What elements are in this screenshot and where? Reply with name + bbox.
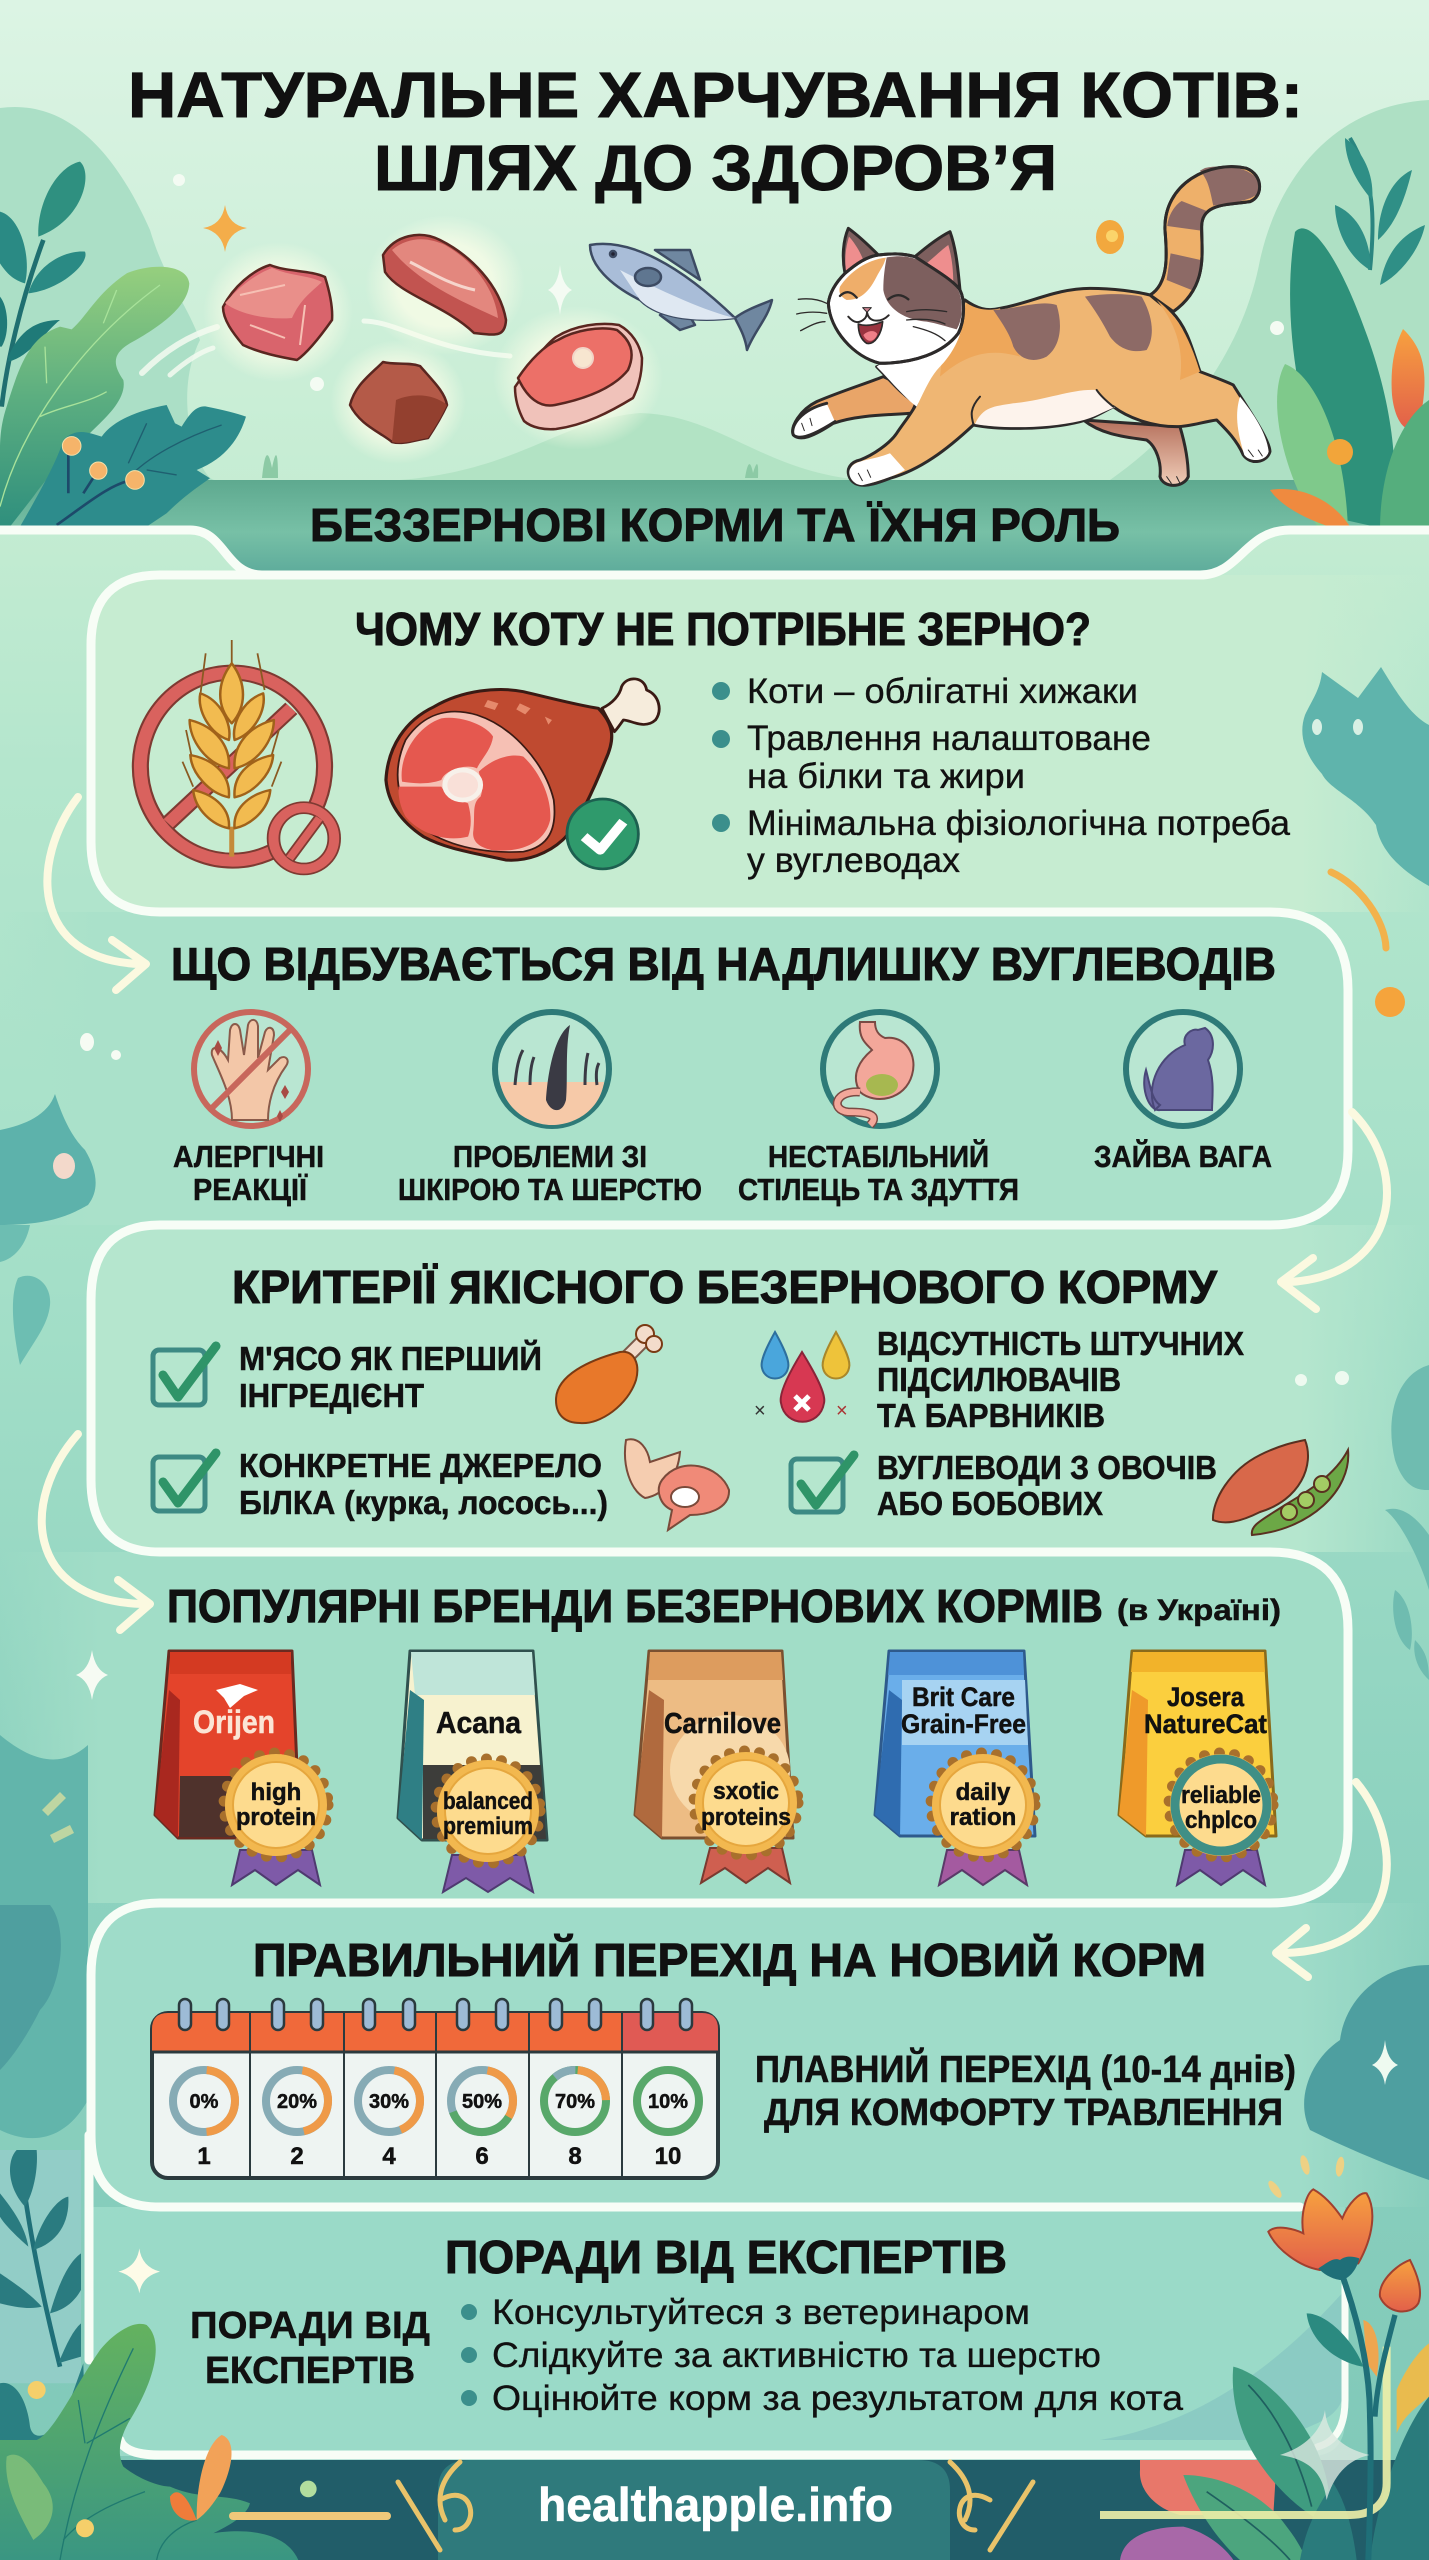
list: why no grain: Травлення налаштоване	[747, 719, 1151, 758]
list: advice	[461, 2293, 1184, 2418]
footer url: healthapple.info	[538, 2478, 893, 2531]
brand: Carnilove bag	[635, 1651, 793, 1838]
side label: ПОРАДИ ВІД	[190, 2305, 430, 2347]
subtitle: БЕЗЗЕРНОВІ КОРМИ ТА ЇХНЯ РОЛЬ	[310, 499, 1120, 551]
criterion: specific protein source: КОНКРЕТНЕ ДЖЕРЕЛО	[239, 1447, 602, 1484]
calendar day numbers	[197, 2143, 681, 2170]
list: advice: Слідкуйте за активністю та шерстю	[492, 2336, 1101, 2375]
sparkles	[173, 174, 1284, 391]
decoration: teal cat left	[0, 1094, 96, 1225]
label: skin and coat problems: ПРОБЛЕМИ ЗІ	[453, 1139, 647, 1174]
donut day 2	[261, 2065, 333, 2137]
calendar day numbers: 2	[290, 2143, 304, 2170]
icon: stomach	[823, 1012, 937, 1126]
bottom-left foliage	[0, 2150, 317, 2560]
decoration: teal cat right	[1302, 667, 1429, 886]
list: why no grain: на білки та жири	[747, 757, 1025, 796]
donut day 4	[353, 2065, 425, 2137]
donut day 4: 30%	[369, 2091, 409, 2113]
badge: high protein: high	[251, 1779, 301, 1806]
panel: correct transition	[152, 1934, 1296, 2178]
criterion: meat first: ІНГРЕДІЄНТ	[239, 1377, 424, 1414]
list: why no grain: Мінімальна фізіологічна потреба	[747, 804, 1291, 843]
title: ШЛЯХ ДО ЗДОРОВ’Я	[374, 132, 1057, 204]
icon: chicken leg	[556, 1325, 662, 1423]
badge: high protein: protein	[236, 1804, 316, 1831]
title: НАТУРАЛЬНЕ ХАРЧУВАННЯ КОТІВ:	[128, 59, 1303, 131]
panel: expert advice	[190, 2231, 1184, 2418]
label: skin and coat problems	[398, 1139, 702, 1207]
badge: reliable choice: reliable	[1181, 1782, 1261, 1809]
badge: exotic proteins: sxotic	[713, 1778, 779, 1805]
icon: dye drops	[754, 1332, 849, 1422]
banner: subtitle band	[205, 532, 1265, 574]
heading: ПОПУЛЯРНІ БРЕНДИ БЕЗЕРНОВИХ КОРМІВ	[167, 1580, 1103, 1632]
label: allergic reactions: РЕАКЦІЇ	[193, 1172, 308, 1207]
badge: balanced premium	[436, 1759, 540, 1892]
icon: overweight cat	[1126, 1012, 1240, 1126]
decorative white snake path	[0, 530, 1429, 2455]
donut day 1	[170, 2067, 238, 2135]
arrow: panel 4 to panel 5	[1276, 1782, 1387, 1977]
decoration: teal blob bottom-right	[1304, 1965, 1429, 2180]
decoration: gold arc	[1331, 872, 1386, 948]
badge: exotic proteins	[694, 1751, 798, 1883]
heading: (в Україні)	[1117, 1594, 1281, 1627]
icon: chicken and salmon	[625, 1439, 729, 1530]
arrow: panel 1 to panel 2	[47, 797, 146, 990]
criterion: specific protein source: БІЛКА (курка, лосось...)	[239, 1484, 608, 1521]
donut day 1: 0%	[190, 2091, 219, 2113]
panel: popular brands	[155, 1580, 1281, 1892]
panel: why a cat does not need grain	[140, 603, 1291, 880]
note: smooth transition: ДЛЯ КОМФОРТУ ТРАВЛЕННЯ	[764, 2092, 1283, 2134]
brand: Acana bag: Acana	[436, 1705, 522, 1740]
icon: checkbox 1	[153, 1346, 216, 1405]
criterion: no artificial enhancers: ПІДСИЛЮВАЧІВ	[877, 1361, 1121, 1398]
decoration: blobs right	[1385, 1365, 1429, 1680]
illustration: happy running cat	[793, 166, 1270, 485]
icon: meat chunks	[203, 215, 663, 464]
ground strip	[0, 480, 1429, 532]
donut day 10	[637, 2070, 699, 2132]
criterion: no artificial enhancers	[877, 1325, 1244, 1434]
brand: Brit Care bag: Brit Care	[912, 1682, 1015, 1712]
calendar day numbers: 1	[197, 2143, 211, 2170]
label: excess weight: ЗАЙВА ВАГА	[1094, 1138, 1272, 1174]
brand: Josera bag: NatureCat	[1144, 1709, 1267, 1739]
calendar day numbers: 4	[382, 2143, 396, 2170]
brand: Carnilove bag: Carnilove	[664, 1708, 781, 1740]
header foliage: left	[0, 162, 246, 527]
donut day 8	[531, 2057, 619, 2145]
side label	[190, 2305, 430, 2392]
decoration: teal cat bottom-left	[0, 1735, 88, 2138]
arrow: panel 3 to panel 4	[42, 1434, 150, 1630]
icon: fish	[590, 244, 772, 350]
brand: Orijen bag	[155, 1651, 300, 1838]
icon: checkbox 2	[153, 1453, 216, 1511]
badge: balanced premium: premium	[443, 1813, 533, 1840]
heading: ЩО ВІДБУВАЄТЬСЯ ВІД НАДЛИШКУ ВУГЛЕВОДІВ	[171, 938, 1276, 990]
badge: reliable choice	[1169, 1753, 1273, 1885]
icon: dye drops: ×	[754, 1400, 766, 1422]
criterion: meat first	[239, 1339, 542, 1414]
criterion: no artificial enhancers: ВІДСУТНІСТЬ ШТУЧНИХ	[877, 1325, 1244, 1362]
heading: ПОРАДИ ВІД ЕКСПЕРТІВ	[445, 2231, 1007, 2283]
panel fills	[0, 575, 1429, 2456]
icon: dye drops: ×	[836, 1400, 848, 1422]
icon: skin and hair	[495, 1012, 609, 1126]
criterion: no artificial enhancers: ТА БАРВНИКІВ	[877, 1397, 1105, 1434]
panel: excess carbohydrates	[171, 938, 1276, 1207]
calendar rings	[179, 1999, 692, 2030]
heading: ПРАВИЛЬНИЙ ПЕРЕХІД НА НОВИЙ КОРМ	[253, 1934, 1206, 1986]
title	[128, 59, 1303, 204]
criterion: carbs from vegetables: АБО БОБОВИХ	[877, 1485, 1103, 1522]
side decorations	[0, 667, 1429, 2180]
heading: ЧОМУ КОТУ НЕ ПОТРІБНЕ ЗЕРНО?	[355, 603, 1091, 655]
icon: crossed wheat	[140, 640, 334, 869]
cat tail	[1150, 166, 1260, 312]
list: advice: Консультуйтеся з ветеринаром	[492, 2293, 1030, 2332]
brand: Josera bag	[1119, 1651, 1276, 1836]
panel: quality criteria	[153, 1261, 1348, 1535]
badge: daily ration: daily	[956, 1779, 1011, 1806]
note: smooth transition	[755, 2046, 1296, 2134]
label: allergic reactions: АЛЕРГІЧНІ	[173, 1139, 324, 1174]
decoration: blobs left	[0, 1225, 50, 1365]
icon: ham with check	[386, 679, 659, 869]
icon: checkbox 3	[791, 1455, 854, 1512]
label: unstable stool and bloating: НЕСТАБІЛЬНИЙ	[768, 1138, 989, 1174]
brand: Acana bag	[398, 1651, 547, 1840]
chart: transition calendar	[152, 1999, 718, 2178]
brand: Orijen bag: Orijen	[193, 1704, 275, 1740]
footer ornament	[233, 2460, 1033, 2560]
donut day 10: 10%	[648, 2091, 688, 2113]
icon: allergy hand	[194, 1012, 308, 1126]
calendar day numbers: 8	[568, 2143, 582, 2170]
list: advice: Оцінюйте корм за результатом для кота	[492, 2379, 1184, 2418]
calendar day numbers: 10	[655, 2143, 681, 2170]
criterion: carbs from vegetables: ВУГЛЕВОДИ З ОВОЧІВ	[877, 1449, 1217, 1486]
badge: reliable choice: chplco	[1185, 1807, 1257, 1834]
footer band	[0, 2460, 1429, 2560]
label: unstable stool and bloating	[738, 1138, 1019, 1207]
badge: high protein	[224, 1753, 328, 1885]
list: why no grain	[712, 672, 1291, 880]
donut day 6	[440, 2059, 524, 2143]
motion swoosh	[142, 321, 510, 375]
note: smooth transition: ПЛАВНИЙ ПЕРЕХІД (10-14 днів)	[755, 2046, 1296, 2091]
side label: ЕКСПЕРТІВ	[205, 2350, 415, 2392]
bottom-right foliage	[1100, 2150, 1429, 2560]
label: unstable stool and bloating: СТІЛЕЦЬ ТА ЗДУТТЯ	[738, 1172, 1019, 1207]
arrow: panel 2 to panel 3	[1281, 1112, 1387, 1309]
brand: Brit Care bag	[875, 1651, 1035, 1836]
list: why no grain: у вуглеводах	[747, 841, 961, 880]
badge: balanced premium: balanced	[443, 1788, 533, 1815]
criterion: specific protein source	[239, 1447, 608, 1521]
calendar day numbers: 6	[475, 2143, 489, 2170]
criterion: carbs from vegetables	[877, 1449, 1217, 1522]
badge: daily ration: ration	[950, 1804, 1016, 1831]
criterion: meat first: М'ЯСО ЯК ПЕРШИЙ	[239, 1339, 542, 1377]
header foliage: right	[1270, 138, 1429, 530]
donut day 2: 20%	[277, 2091, 317, 2113]
header illustration backdrop: hills	[0, 100, 1429, 530]
icon: sweet potato and peas	[1213, 1440, 1348, 1535]
label: allergic reactions	[173, 1139, 324, 1207]
badge: daily ration	[931, 1753, 1035, 1885]
label: skin and coat problems: ШКІРОЮ ТА ШЕРСТЮ	[398, 1172, 702, 1207]
brand: Brit Care bag: Grain-Free	[901, 1709, 1026, 1739]
badge: exotic proteins: proteins	[701, 1804, 791, 1831]
heading: КРИТЕРІЇ ЯКІСНОГО БЕЗЕРНОВОГО КОРМУ	[232, 1261, 1218, 1313]
donut day 6: 50%	[462, 2091, 502, 2113]
list: why no grain: Коти – облігатні хижаки	[747, 672, 1138, 711]
brand: Josera bag: Josera	[1167, 1682, 1245, 1712]
donut day 8: 70%	[555, 2091, 595, 2113]
